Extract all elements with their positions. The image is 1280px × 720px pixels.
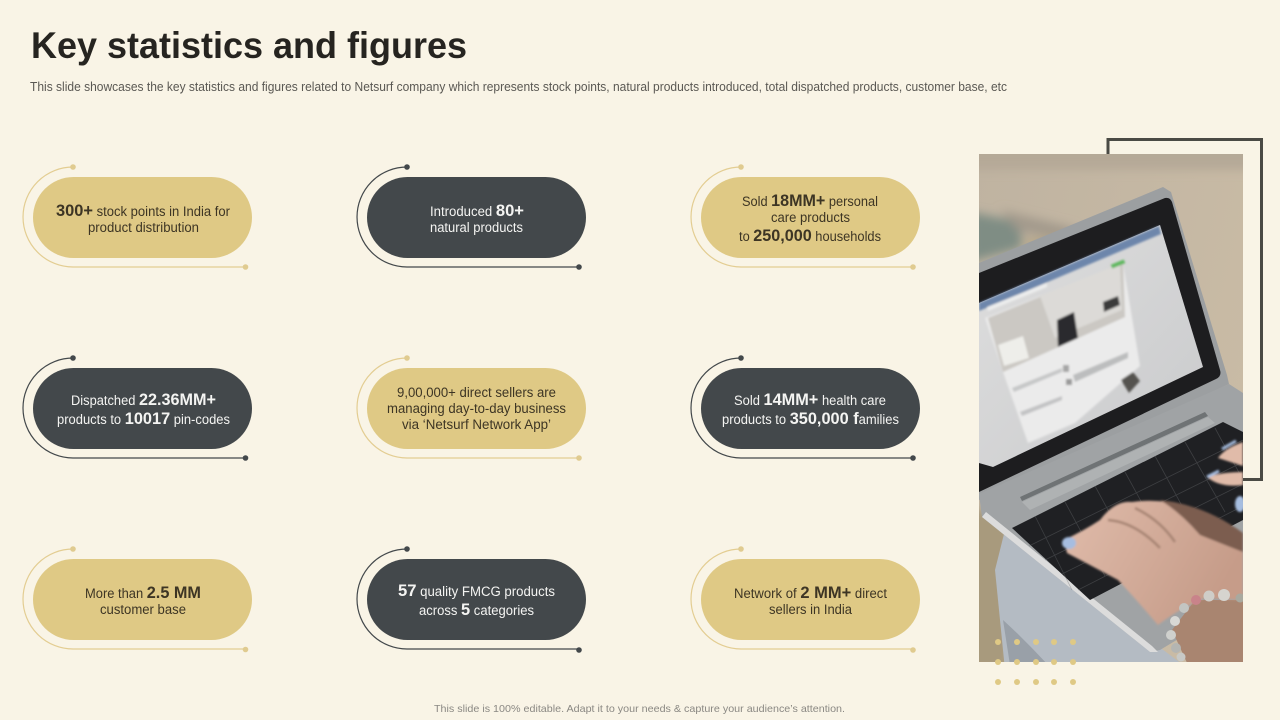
keyboard — [1012, 422, 1243, 600]
card: natural products — [357, 164, 586, 270]
card: network of sellers — [691, 546, 920, 653]
card: personal care products: Sold 18MM+ personal — [742, 191, 878, 210]
card: FMCG products — [357, 546, 586, 653]
card: personal care products — [691, 164, 920, 270]
card: direct sellers app: via ‘Netsurf Network App’ — [402, 417, 551, 432]
card: stock points: 300+ stock points in India for — [56, 201, 230, 220]
decorative dot grid — [995, 639, 1076, 685]
laptop screen — [979, 225, 1203, 467]
title: Key statistics and figures — [31, 25, 467, 66]
card: personal care products: care products — [771, 210, 850, 225]
card: customer base: customer base — [100, 602, 186, 617]
card: direct sellers app: 9,00,000+ direct sellers are — [397, 385, 556, 400]
card: dispatched products — [23, 355, 252, 461]
card: stock points: product distribution — [88, 220, 199, 235]
jeans — [995, 534, 1179, 662]
card: dispatched products: Dispatched 22.36MM+ — [71, 390, 216, 409]
hand — [1062, 441, 1245, 625]
photo frame — [1108, 140, 1262, 480]
wrist — [1172, 600, 1243, 665]
card: dispatched products: products to 10017 pin-codes — [57, 409, 230, 428]
card: health care products — [691, 355, 920, 461]
card: natural products: natural products — [430, 220, 523, 235]
card: stock points — [23, 164, 252, 270]
card: direct sellers app: managing day-to-day business — [387, 401, 566, 416]
card: health care products: products to 350,000 families — [722, 409, 899, 428]
card: customer base — [23, 546, 252, 652]
card: network of sellers: sellers in India — [769, 602, 852, 617]
photo: hands on laptop — [979, 154, 1243, 662]
card: natural products: Introduced 80+ — [430, 201, 524, 220]
footer note: This slide is 100% editable. Adapt it to your needs & capture your audience’s attention. — [434, 703, 845, 715]
card: FMCG products: 57 quality FMCG products — [398, 581, 555, 600]
bracelet — [1166, 589, 1244, 662]
card: personal care products: to 250,000 households — [739, 226, 881, 245]
subtitle: This slide showcases the key statistics and figures related to Netsurf company which represents stock points, natural products introduced, total dispatched products, customer base, etc — [30, 80, 1007, 94]
card: customer base: More than 2.5 MM — [85, 583, 201, 602]
web page content — [979, 226, 1161, 443]
laptop base — [979, 384, 1243, 652]
card: health care products: Sold 14MM+ health care — [734, 390, 886, 409]
laptop lid — [979, 187, 1229, 500]
card: network of sellers: Network of 2 MM+ direct — [734, 583, 887, 602]
card: FMCG products: across 5 categories — [419, 600, 534, 619]
laptop bezel — [979, 198, 1220, 492]
card: direct sellers app — [357, 355, 586, 461]
